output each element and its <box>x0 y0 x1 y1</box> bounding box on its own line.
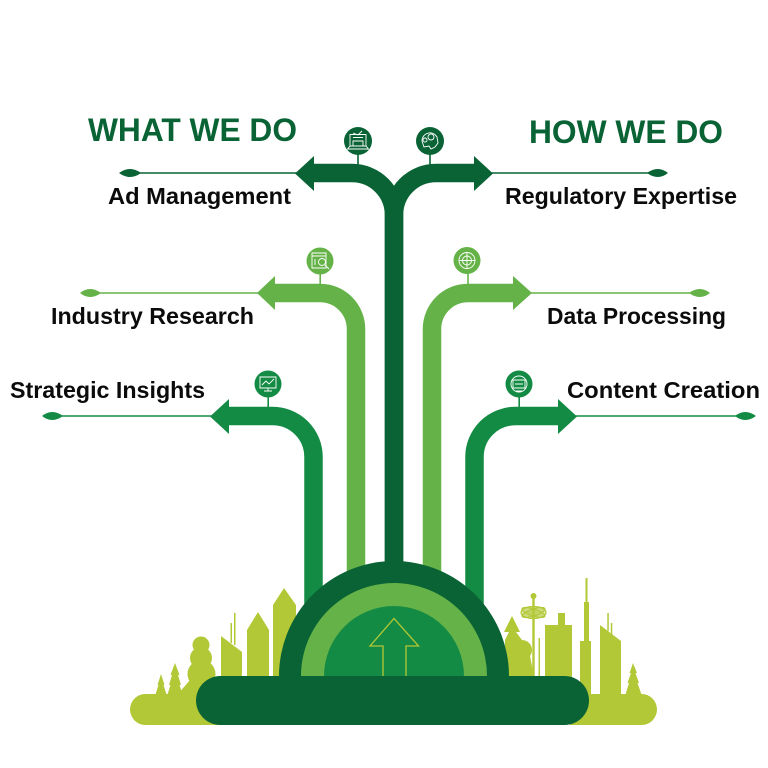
arrow: light green right <box>432 276 532 610</box>
icon: content creation <box>506 370 532 408</box>
icon: head with gears <box>416 127 444 166</box>
heading: what we do: WHAT WE DO <box>88 112 297 148</box>
label: industry research: Industry Research <box>51 303 254 329</box>
label: ad management: Ad Management <box>108 183 291 209</box>
icon: research page <box>306 248 334 285</box>
arrow: light green left <box>257 276 356 610</box>
skyline: left city <box>130 588 300 725</box>
arrow: dark central split <box>295 156 493 600</box>
icon: chart monitor <box>254 370 282 408</box>
icon: brain chip <box>454 247 480 285</box>
icon: laptop growth <box>344 127 372 166</box>
heading: how we do: HOW WE DO <box>529 114 723 150</box>
label: regulatory expertise: Regulatory Expertise <box>505 183 737 209</box>
arrow: mid green right <box>474 399 577 625</box>
arrow: mid green left <box>210 399 314 625</box>
label: content creation: Content Creation <box>567 377 760 403</box>
base: dome and platform <box>196 561 589 725</box>
skyline: right city <box>504 578 657 725</box>
icon: up arrow outline <box>370 618 418 677</box>
connector lines and leaves <box>42 169 756 420</box>
label: strategic insights: Strategic Insights <box>10 377 205 403</box>
label: data processing: Data Processing <box>547 303 726 329</box>
